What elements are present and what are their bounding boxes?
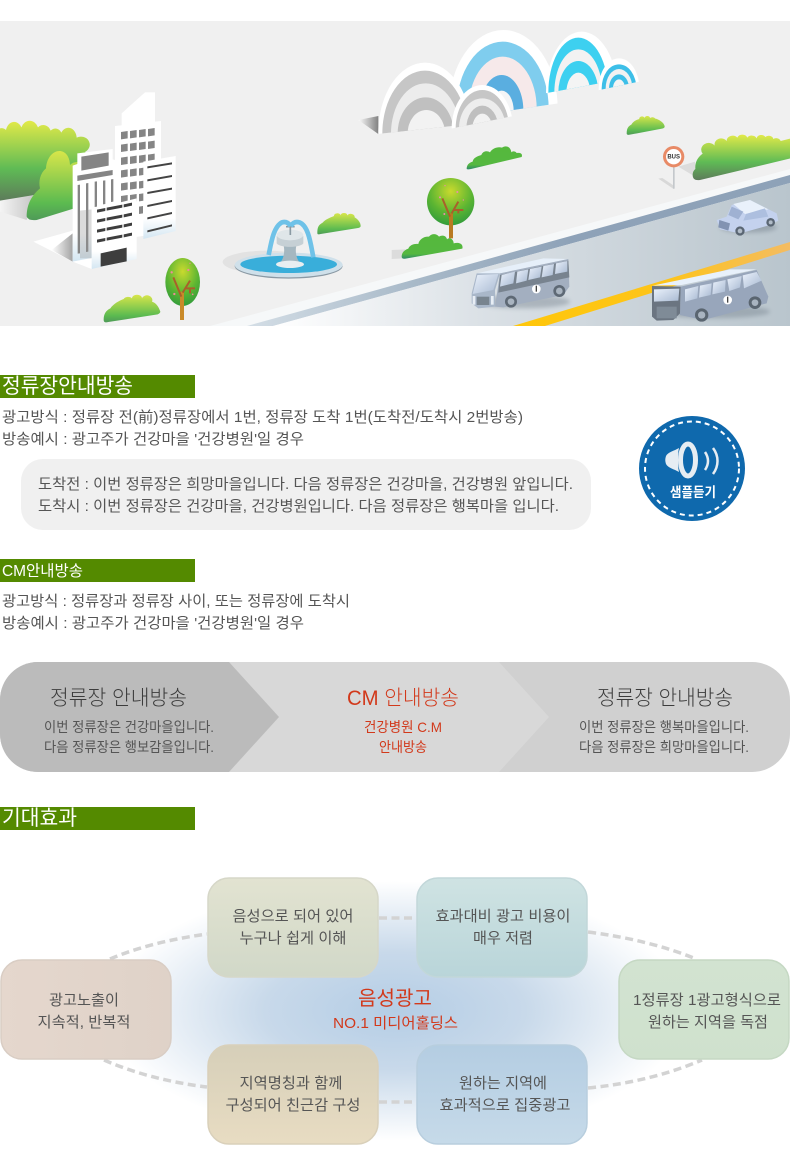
box: exposure: 지속적, 반복적 bbox=[38, 1014, 130, 1031]
vehicles bbox=[472, 200, 778, 322]
stop announcement description: 광고방식 : 정류장 전(前)정류장에서 1번, 정류장 도착 1번(도착전/도착시 2번방송) bbox=[2, 409, 523, 426]
box: cost: 매우 저렴 bbox=[473, 930, 533, 947]
box: exclusive: 1정류장 1광고형식으로 bbox=[633, 992, 781, 1009]
section heading: expected effects: 기대효과 bbox=[2, 807, 77, 830]
section heading: stop announcement bbox=[0, 375, 195, 398]
bus stop sign: BUS bbox=[667, 155, 680, 161]
right segment text: 이번 정류장은 행복마을입니다. bbox=[579, 719, 749, 735]
left segment bbox=[0, 662, 279, 772]
middle segment: CM bbox=[229, 662, 549, 772]
right illustration elements bbox=[378, 30, 790, 259]
box: familiarity: 지역명칭과 함께 bbox=[240, 1075, 342, 1092]
road bbox=[210, 169, 790, 326]
box: exposure: 광고노출이 bbox=[49, 992, 119, 1009]
bus 1 bbox=[472, 258, 570, 308]
center text: NO.1 미디어홀딩스 bbox=[333, 1015, 458, 1032]
buildings bbox=[33, 92, 176, 269]
middle segment text: CM 안내방송 bbox=[347, 687, 459, 710]
bus stop sign bbox=[658, 146, 684, 189]
arch ground shadow bbox=[362, 116, 378, 134]
center text bbox=[333, 987, 458, 1032]
box: exclusive bbox=[619, 960, 789, 1059]
section heading: stop announcement: 정류장안내방송 bbox=[2, 375, 133, 398]
section heading: CM announcement: CM안내방송 bbox=[2, 562, 83, 580]
stop announcement description: 방송예시 : 광고주가 건강마을 '건강병원'일 경우 bbox=[2, 431, 304, 448]
box: voice bbox=[208, 878, 378, 977]
box: targeting bbox=[417, 1045, 587, 1144]
box: voice: 음성으로 되어 있어 bbox=[232, 908, 354, 925]
section heading: expected effects bbox=[0, 807, 195, 830]
small bush upper right bbox=[627, 116, 665, 135]
bush near fountain bbox=[317, 213, 361, 234]
right segment text: 다음 정류장은 희망마을입니다. bbox=[579, 739, 749, 755]
middle segment text: 건강병원 C.M bbox=[364, 719, 442, 735]
section heading: CM announcement bbox=[0, 559, 195, 582]
tree bbox=[165, 258, 200, 320]
rainbow arches bbox=[378, 30, 638, 134]
right segment text bbox=[579, 687, 749, 755]
box: cost: 효과대비 광고 비용이 bbox=[436, 908, 570, 925]
box: familiarity bbox=[208, 1045, 378, 1144]
fountain bbox=[223, 222, 343, 279]
left illustration elements bbox=[0, 92, 378, 322]
box: exclusive: 원하는 지역을 독점 bbox=[648, 1014, 768, 1031]
stop announcement description bbox=[2, 409, 523, 448]
expected effects diagram bbox=[1, 878, 789, 1144]
bus 2 bbox=[652, 269, 770, 322]
center text: 음성광고 bbox=[358, 987, 432, 1010]
example announcement box: 도착전 : 이번 정류장은 희망마을입니다. 다음 정류장은 건강마을, 건강병원 앞입니다. bbox=[38, 476, 573, 493]
icon: sample listen button: 샘플듣기 bbox=[670, 485, 716, 500]
left segment text: 이번 정류장은 건강마을입니다. bbox=[44, 719, 214, 735]
CM announcement description bbox=[2, 593, 350, 632]
middle segment text: 안내방송 bbox=[379, 739, 427, 755]
big bushes behind buildings bbox=[0, 121, 90, 220]
large bush right bbox=[678, 135, 790, 180]
box: exposure bbox=[1, 960, 171, 1059]
small bush by tree bbox=[104, 295, 160, 322]
car bbox=[717, 200, 778, 236]
tree with bush bbox=[392, 178, 474, 259]
CM announcement description: 광고방식 : 정류장과 정류장 사이, 또는 정류장에 도착시 bbox=[2, 593, 350, 610]
left segment text bbox=[44, 687, 214, 755]
box: voice: 누구나 쉽게 이해 bbox=[240, 930, 346, 947]
dark green bush bbox=[467, 146, 522, 169]
left segment text: 다음 정류장은 행보감을입니다. bbox=[44, 739, 214, 755]
example announcement box: 도착시 : 이번 정류장은 건강마을, 건강병원입니다. 다음 정류장은 행복마을 입니다. bbox=[38, 498, 559, 515]
hero illustration: city street with bus stop bbox=[0, 21, 790, 326]
broadcast sequence banner bbox=[0, 662, 790, 772]
CM announcement description: 방송예시 : 광고주가 건강마을 '건강병원'일 경우 bbox=[2, 615, 304, 632]
box: familiarity: 구성되어 친근감 구성 bbox=[226, 1097, 360, 1114]
example announcement box bbox=[21, 459, 591, 530]
box: targeting: 원하는 지역에 bbox=[459, 1075, 547, 1092]
right segment text: 정류장 안내방송 bbox=[597, 687, 733, 710]
left segment text: 정류장 안내방송 bbox=[50, 687, 187, 710]
box: targeting: 효과적으로 집중광고 bbox=[440, 1097, 570, 1114]
icon: sample listen button bbox=[639, 416, 745, 521]
middle segment text bbox=[347, 687, 459, 755]
box: cost bbox=[417, 878, 587, 977]
